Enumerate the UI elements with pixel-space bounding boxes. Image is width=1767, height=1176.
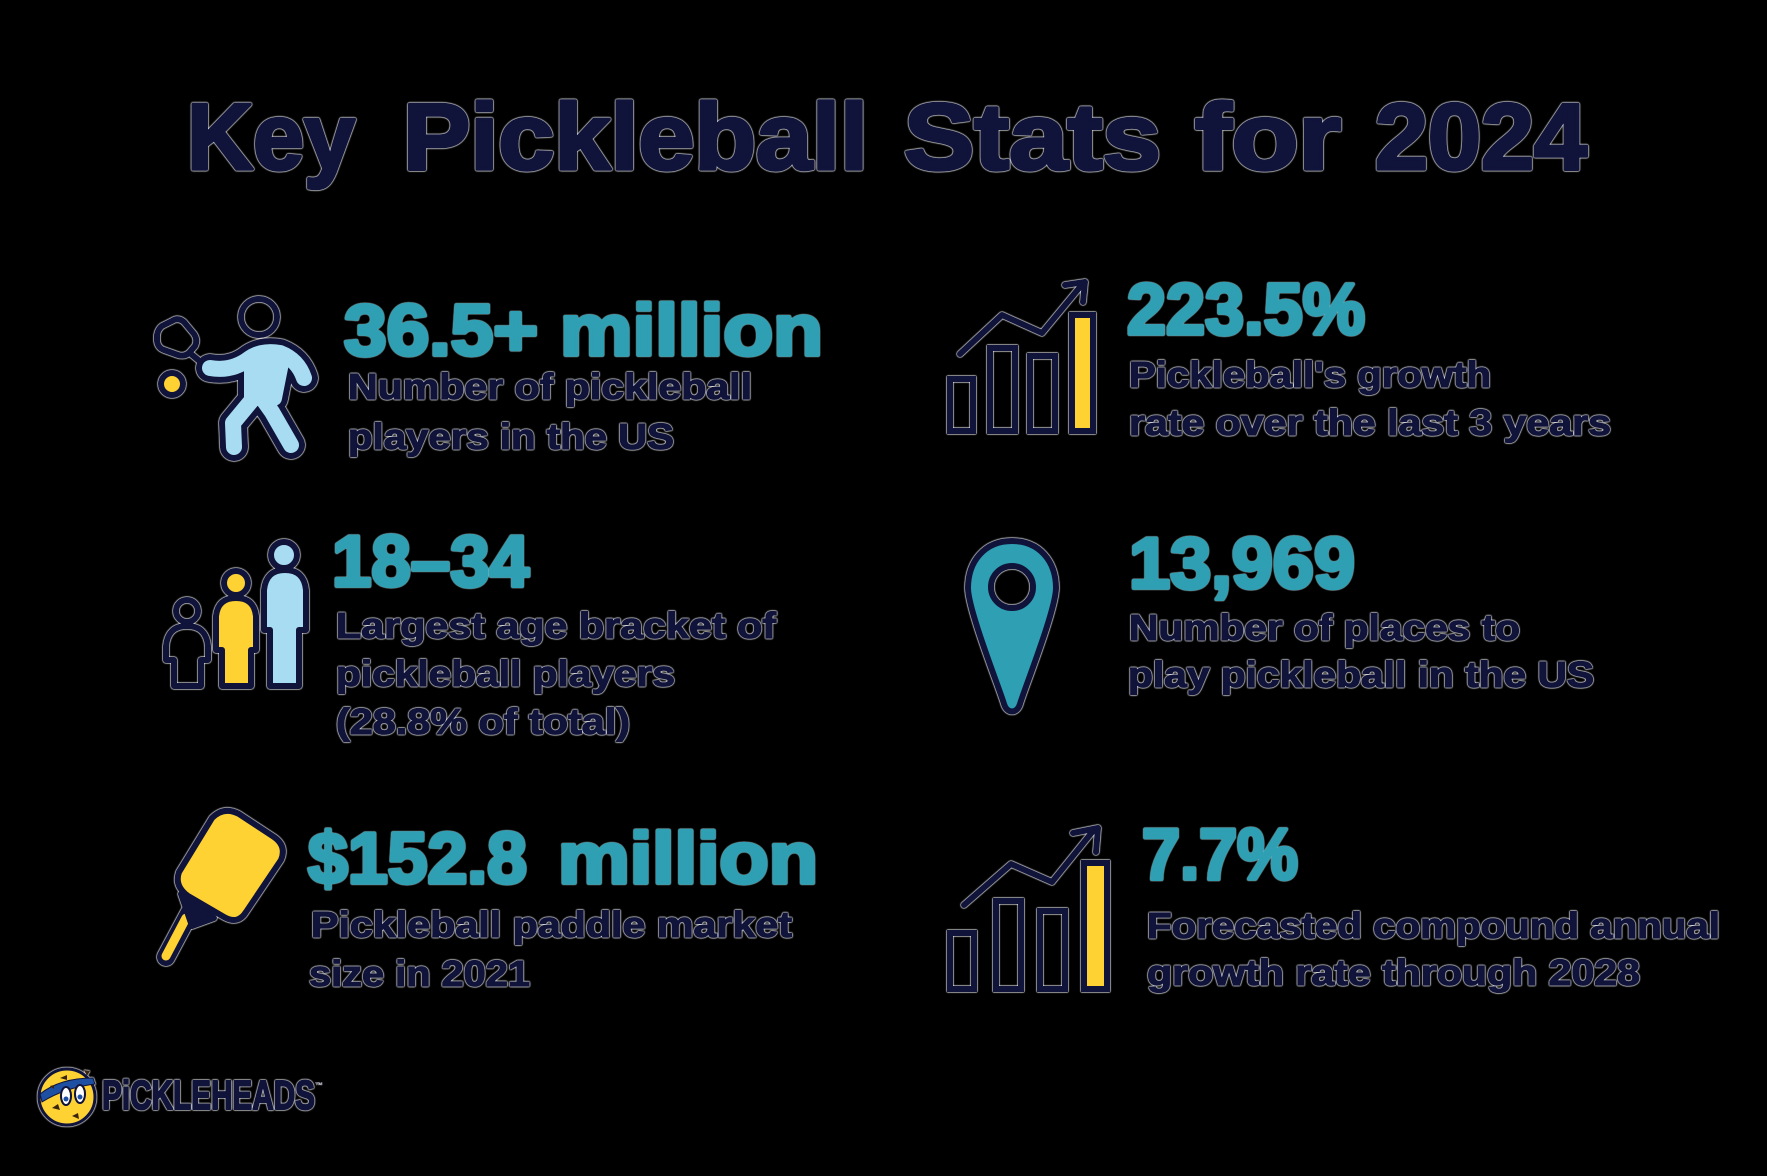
title: for xyxy=(1195,84,1341,189)
title: Stats xyxy=(904,84,1161,189)
stat value: million xyxy=(560,291,823,371)
title: Key xyxy=(187,84,355,189)
description: Forecasted compound annual xyxy=(1147,905,1720,946)
title: Pickleball xyxy=(403,84,868,189)
stat value: $152.8 xyxy=(308,819,527,899)
icon: bar chart with arrow xyxy=(950,828,1107,989)
icon: pickleball paddle xyxy=(166,811,283,957)
panel: age bracket xyxy=(166,522,777,742)
icon: family of three figures xyxy=(166,542,306,686)
stat value: 223.5% xyxy=(1127,270,1365,350)
icon: player with racket xyxy=(157,299,304,447)
title: 2024 xyxy=(1375,84,1587,189)
stat value: 13,969 xyxy=(1129,524,1355,604)
description line 2: players in the US xyxy=(348,416,674,457)
panel: players in the US xyxy=(157,291,823,457)
stat value: million xyxy=(558,819,818,899)
description line 3: (28.8% of total) xyxy=(336,701,630,742)
title xyxy=(187,84,1587,189)
description line 2: pickleball players xyxy=(336,653,675,694)
panel: compound annual growth xyxy=(950,815,1720,993)
description line 2: rate over the last 3 years xyxy=(1129,402,1611,443)
icon: bar chart with arrow xyxy=(950,282,1093,431)
icon: pickle head mascot xyxy=(39,1069,95,1125)
description line 2: play pickleball in the US xyxy=(1128,654,1594,695)
description: Number of pickleball xyxy=(348,366,752,407)
stat value: 36.5+ xyxy=(344,291,538,371)
stat value: 18–34 xyxy=(332,522,529,602)
description line 2: size in 2021 xyxy=(309,953,530,994)
description: Number of places to xyxy=(1129,607,1520,648)
stat value xyxy=(308,819,818,899)
description: Pickleball's growth xyxy=(1129,354,1491,395)
panel: places to play xyxy=(968,524,1594,712)
description line 2: growth rate through 2028 xyxy=(1147,952,1640,993)
stat value xyxy=(344,291,823,371)
wordmark: PiCKLEHEADS xyxy=(102,1072,315,1118)
stat value: 7.7% xyxy=(1142,815,1298,895)
logo: Pickleheads xyxy=(39,1069,323,1125)
panel: paddle market xyxy=(166,811,818,994)
trademark: ™ xyxy=(315,1081,323,1090)
description: Pickleball paddle market xyxy=(311,904,792,945)
panel: growth rate xyxy=(950,270,1611,443)
description: Largest age bracket of xyxy=(336,605,777,646)
icon: map pin xyxy=(968,541,1056,712)
